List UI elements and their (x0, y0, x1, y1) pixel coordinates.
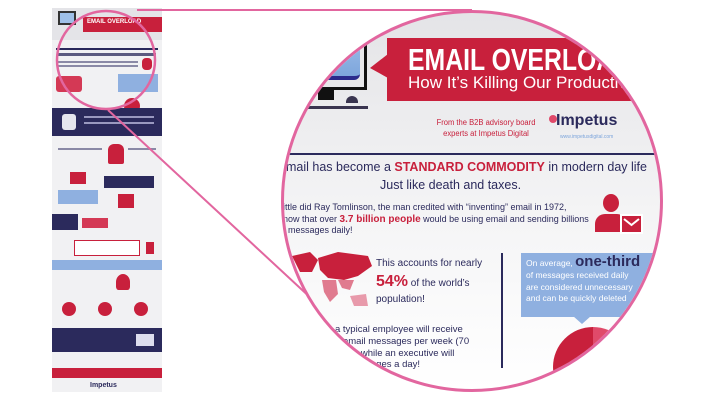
thumb red bordered box (74, 240, 140, 256)
logo: Impetus: www.impetusdigital.com (560, 134, 613, 140)
source text: From the B2B advisory board (437, 118, 535, 127)
stat: 54%: This accounts for nearly (376, 258, 482, 269)
icon: person with envelope (595, 194, 643, 234)
title band (370, 38, 644, 101)
thumb footer logo: Impetus (90, 382, 117, 389)
logo: Impetus (549, 112, 617, 140)
stat: 54%: 54% of the world’s (376, 273, 470, 290)
callout: one-third: are considered unnecessary (526, 282, 633, 292)
Ray Tomlinson text: f messages daily! (283, 225, 353, 235)
thumb intro (56, 48, 158, 50)
magnified circle (281, 10, 663, 392)
title text: EMAIL OVERLOAD (408, 42, 632, 77)
employee messages text: 30 messages a day! (335, 359, 420, 370)
thumb navy band 2 (52, 328, 162, 352)
headline statement: mail has become a STANDARD COMMODITY in modern day life (286, 160, 647, 174)
thumb red band (52, 368, 162, 378)
Ray Tomlinson text (283, 202, 589, 235)
thumb blue band (52, 260, 162, 270)
thumb navy band (52, 108, 162, 136)
thumb section 4 (70, 172, 86, 184)
callout: one-third (521, 253, 653, 324)
source text (437, 118, 535, 138)
thumbnail: full infographic: EMAIL OVERLOAD (87, 19, 141, 25)
thumbnail: full infographic (52, 8, 162, 392)
logo: Impetus: Impetus (556, 112, 617, 129)
Ray Tomlinson text: ittle did Ray Tomlinson, the man credited with “inventing” email in 1972, (283, 202, 566, 212)
magnified circle: Just like death and taxes. (380, 178, 521, 192)
thumb header (52, 8, 162, 40)
stat: 54% (376, 258, 482, 305)
icon: monitor (308, 45, 368, 109)
employee messages text: a typical employee will receive (335, 324, 463, 335)
Ray Tomlinson text: now that over 3.7 billion people would be using email and sending billions (283, 214, 589, 224)
pie chart (553, 327, 633, 400)
callout: one-third: On average, one-third (526, 253, 640, 270)
employee messages text: kday) while an executive will (335, 348, 454, 359)
icon: world map (292, 252, 372, 306)
employee messages text (335, 324, 469, 370)
employee messages text: 0 email messages per week (70 (335, 336, 469, 347)
source text: experts at Impetus Digital (443, 129, 529, 138)
thumb three circles (62, 302, 76, 316)
subtitle: How It’s Killing Our Productivity (408, 73, 644, 92)
callout: one-third: and can be quickly deleted (526, 293, 627, 303)
thumb section 3 (108, 144, 124, 164)
stat: 54%: population! (376, 294, 425, 305)
callout: one-third: of messages received daily (526, 270, 629, 280)
